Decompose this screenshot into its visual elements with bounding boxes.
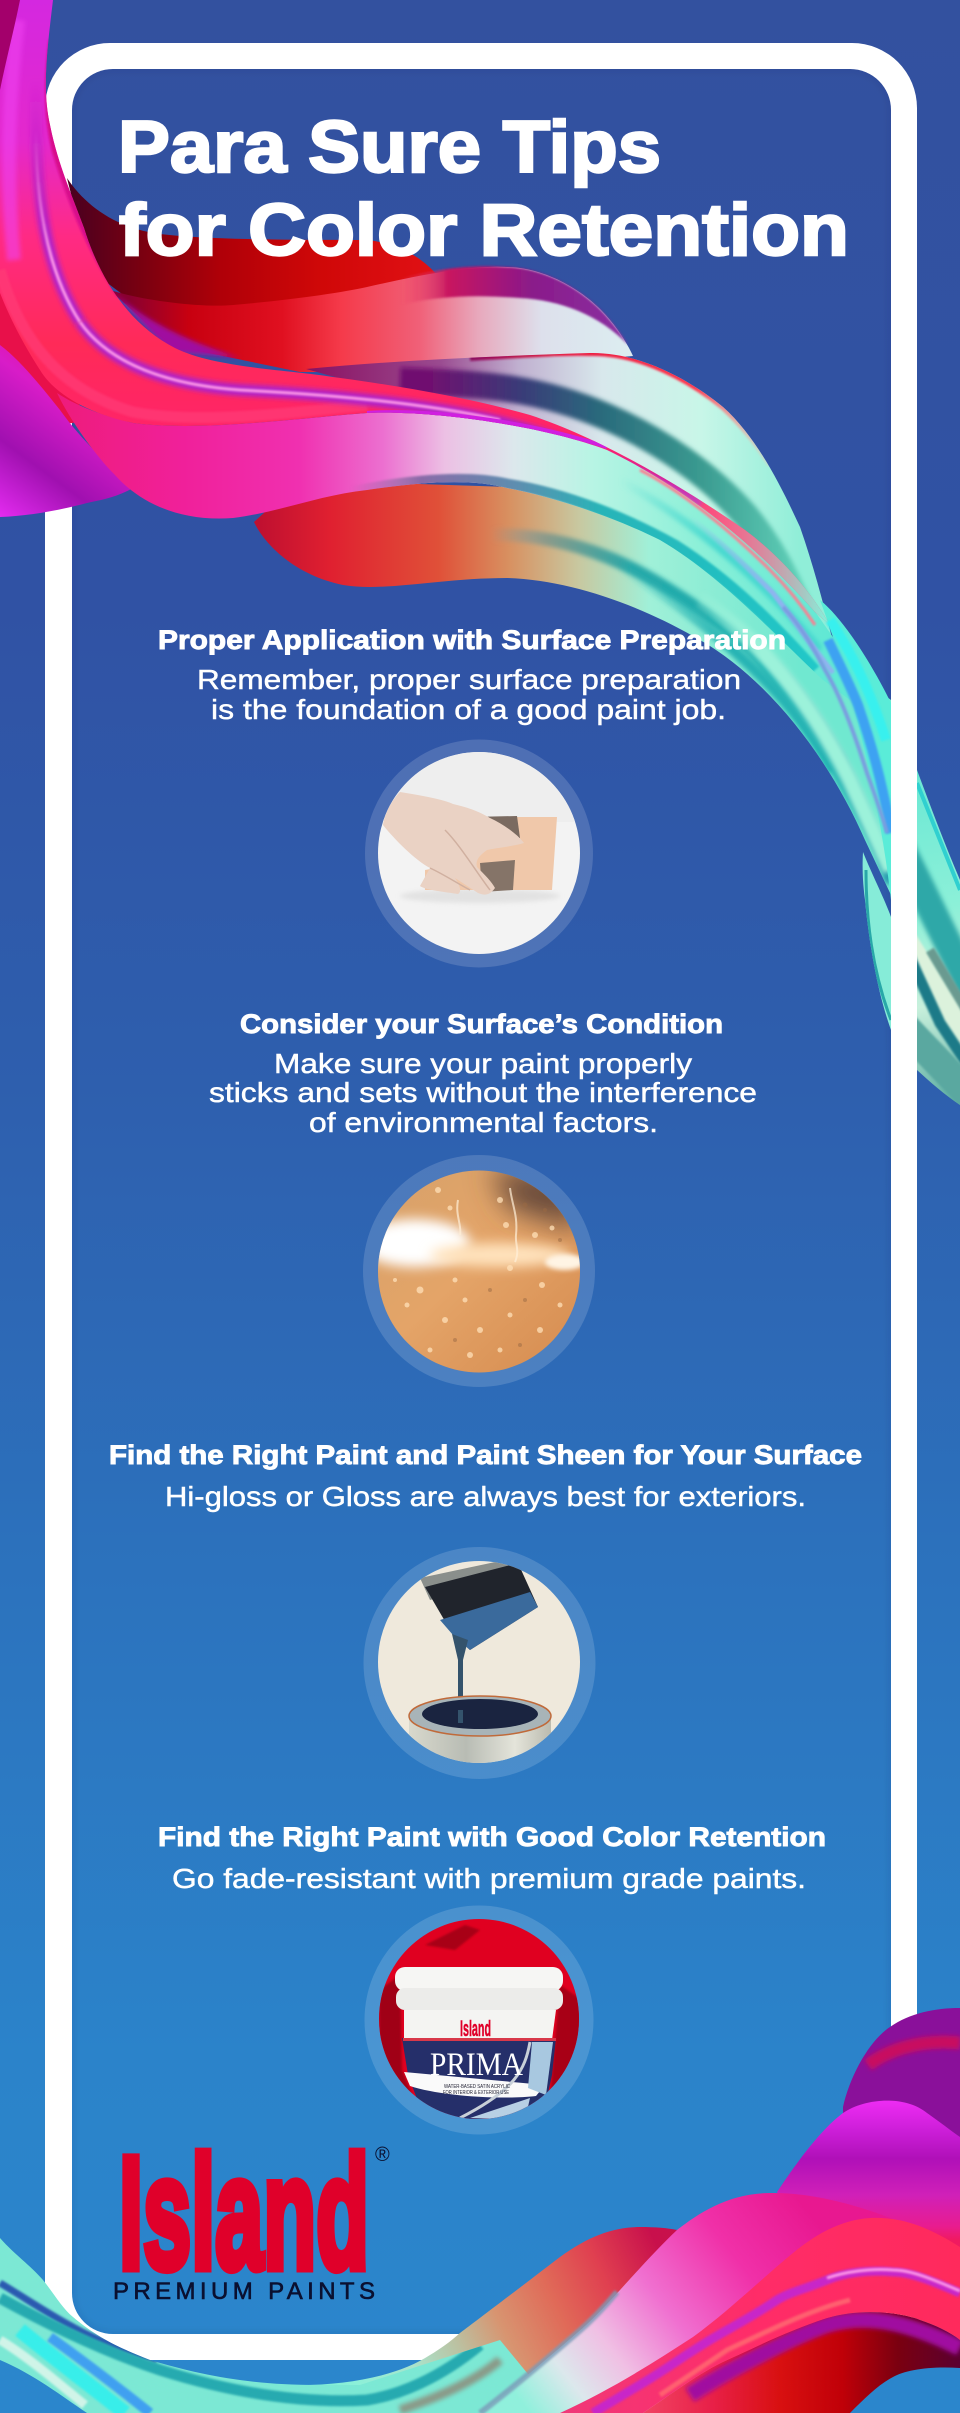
- bottom paint ribbon: [0, 2008, 960, 2413]
- ribbon: orange to mint fold: [254, 480, 891, 895]
- frame right bar over ribbon: [891, 600, 917, 1160]
- ribbon: pink to pale to mint fold: [57, 393, 850, 700]
- bucket small print: [443, 2084, 510, 2094]
- tip 3 text: Find the Right Paint and Paint Sheen for Your Surface: [109, 1440, 862, 1470]
- tip 2 text: of environmental factors.: [309, 1107, 658, 1138]
- Island Premium Paints logo: [113, 2123, 390, 2305]
- ribbon: crimson underside: [0, 290, 90, 425]
- tip 1 text: is the foundation of a good paint job.: [211, 694, 726, 725]
- ribbon: teal lower-left fold: [0, 2238, 560, 2413]
- logo tagline: PREMIUM PAINTS: [113, 2278, 375, 2305]
- title: [118, 107, 849, 271]
- tip 2 text: Consider your Surface’s Condition: [240, 1009, 723, 1039]
- tip 3 text: [109, 1440, 862, 1512]
- bucket small print: WATER-BASED SATIN ACRYLIC: [444, 2084, 510, 2090]
- bucket product name: PRIMA: [430, 2047, 523, 2083]
- tip 1 text: Remember, proper surface preparation: [197, 664, 741, 695]
- ribbon: bright magenta fold: [777, 2101, 960, 2250]
- ribbon: outer right tail: [917, 770, 960, 1105]
- ribbon: mint sliver: [863, 852, 891, 1030]
- ribbon: salmon to pale fold: [110, 266, 633, 372]
- ribbon: magenta to red main fold: [0, 0, 840, 640]
- ribbon: pink-red main fold: [560, 2218, 960, 2413]
- ribbon: white-mint fold with red rim: [306, 353, 835, 650]
- tip 2 text: sticks and sets without the interference: [209, 1077, 757, 1108]
- tip 4 text: Find the Right Paint with Good Color Retention: [158, 1822, 826, 1852]
- tip 1 photo: hand sanding wood: [365, 740, 593, 968]
- tip 1 text: [158, 625, 786, 725]
- tip 1 text: Proper Application with Surface Preparation: [158, 625, 786, 655]
- tip 4 text: [158, 1822, 826, 1894]
- ribbon: pink to pale fold: [480, 2193, 900, 2413]
- logo registered mark: ®: [375, 2144, 390, 2166]
- tip 4 photo: Prima paint bucket: Island: [460, 2016, 491, 2041]
- tip 2 photo: wet surface: [360, 1155, 595, 1387]
- tip 2 text: Make sure your paint properly: [274, 1048, 692, 1079]
- ribbon: red arch interior: [643, 2312, 960, 2413]
- tip 3 text: Hi-gloss or Gloss are always best for exteriors.: [165, 1481, 806, 1512]
- title: Para Sure Tips: [118, 107, 661, 188]
- tip 2 text: [209, 1009, 757, 1138]
- logo wordmark: Island: [119, 2123, 369, 2302]
- ribbon: dark red fold: [67, 178, 437, 310]
- top paint ribbon: [0, 0, 960, 1106]
- ribbon: orange to mint fold: [300, 2227, 677, 2413]
- tip 3 photo: brush and paint can: [364, 1547, 596, 1779]
- bucket small print: FOR INTERIOR & EXTERIOR USE: [443, 2090, 509, 2096]
- title: for Color Retention: [119, 190, 849, 271]
- ribbon: magenta lower-left fold: [0, 345, 133, 517]
- tip 4 text: Go fade-resistant with premium grade paints.: [172, 1863, 806, 1894]
- ribbon: dark magenta corner: [0, 0, 20, 90]
- ribbon: cyan outer fold: [783, 600, 891, 900]
- ribbon: dark purple back fold: [843, 2008, 960, 2200]
- tip 4 photo: Prima paint bucket: [364, 1906, 594, 2134]
